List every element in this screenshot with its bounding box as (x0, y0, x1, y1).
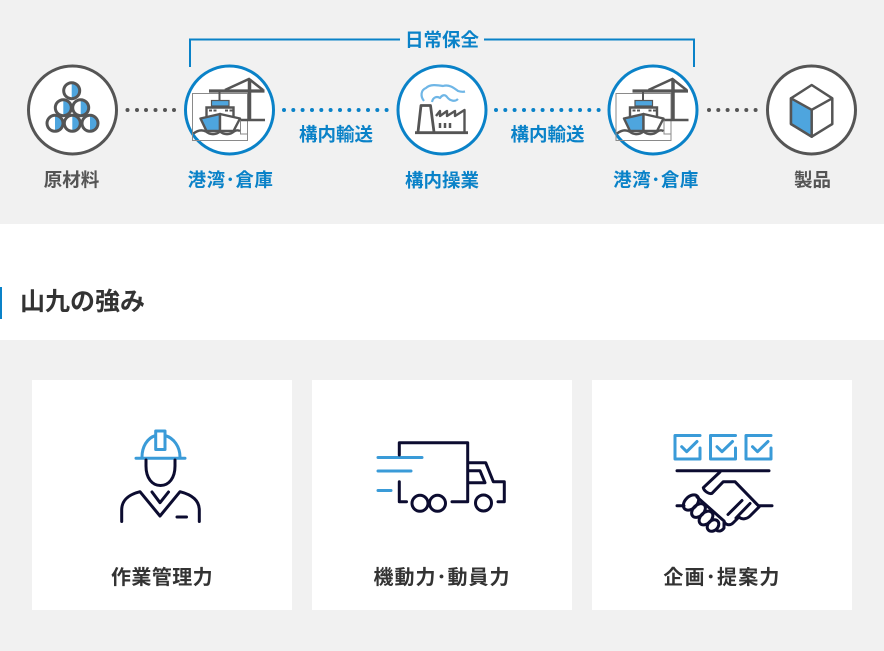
icon: cube (791, 85, 832, 137)
step: in-yard operation (398, 66, 486, 191)
icon: truck (378, 443, 504, 511)
label: work management: 作業管理力 (111, 566, 213, 589)
label: raw materials: 原材料 (44, 170, 100, 190)
icon: stacked pipes (47, 83, 98, 131)
label: port and warehouse: 港湾･倉庫 (613, 170, 699, 190)
background panel: strengths (0, 340, 884, 651)
label: in-yard transport right: 構内輸送 (510, 124, 585, 145)
label: daily maintenance: 日常保全 (405, 30, 479, 50)
icon: worker with helmet (122, 431, 199, 522)
step: port and warehouse left (186, 66, 274, 190)
step: product (768, 66, 856, 190)
label: product: 製品 (794, 170, 831, 190)
step: raw materials (28, 66, 116, 190)
icon: ship and crane (616, 79, 688, 140)
card: work management (32, 380, 292, 610)
label: port and warehouse: 港湾･倉庫 (188, 170, 273, 190)
dotted connector: plant to port (494, 108, 601, 112)
label: planning: 企画･提案力 (663, 566, 781, 589)
icon: factory (415, 85, 468, 133)
bracket: daily maintenance span (190, 40, 694, 67)
heading accent bar (0, 287, 2, 319)
dotted connector: raw materials to port (126, 108, 176, 112)
step: port and warehouse right (609, 66, 699, 190)
label: mobility: 機動力･動員力 (374, 566, 510, 589)
background panel: process flow (0, 0, 884, 224)
heading: strengths of Sankyu: 山九の強み (20, 288, 145, 316)
card: planning (592, 380, 852, 610)
icon: checklist and handshake (675, 436, 772, 534)
label: in-yard operation: 構内操業 (405, 170, 479, 191)
dotted connector: port to product (707, 108, 758, 112)
label: in-yard transport left: 構内輸送 (299, 124, 373, 145)
dotted connector: port to plant (282, 108, 389, 112)
card: mobility (312, 380, 572, 610)
icon: ship and crane (192, 79, 265, 140)
